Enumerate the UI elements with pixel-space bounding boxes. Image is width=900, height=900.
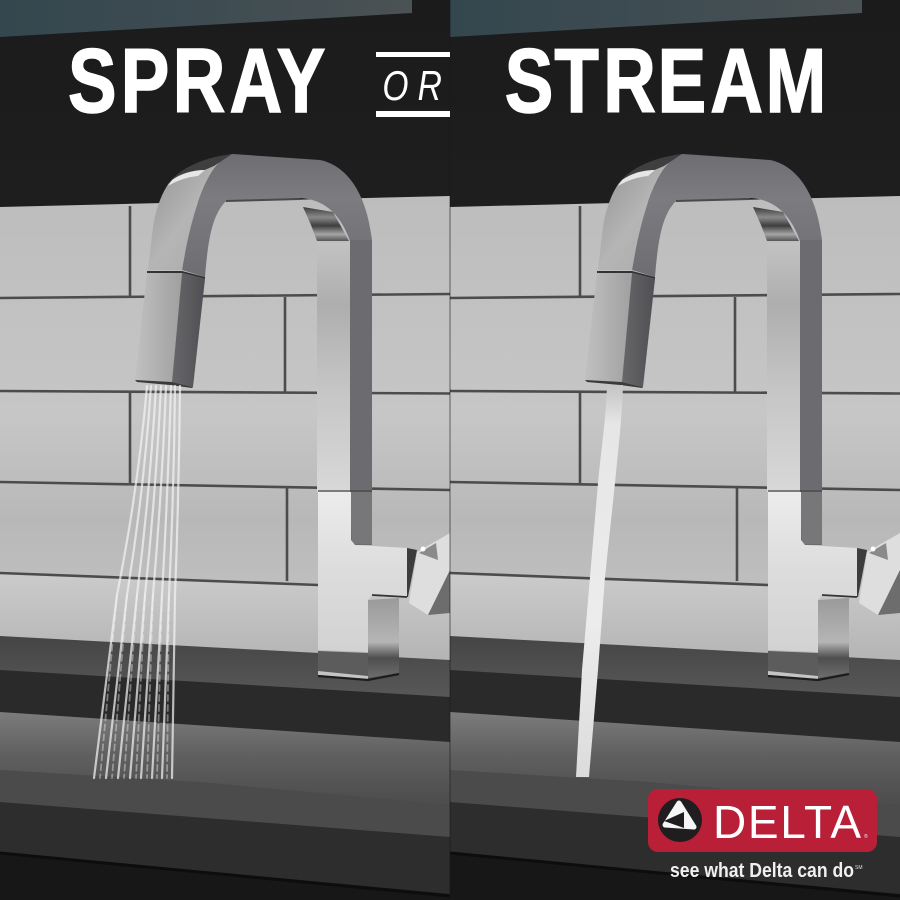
registered mark: ® — [864, 833, 868, 840]
logo: Delta — [648, 789, 877, 882]
heading: OR with rules — [376, 52, 450, 117]
wall, tiles, counter and sink background — [0, 0, 450, 900]
divider seam — [450, 0, 451, 900]
red badge — [648, 789, 877, 852]
tagline: see what Delta can do — [670, 860, 854, 882]
heading: SPRAY: SPRAY — [68, 30, 325, 132]
faucet: stream mode — [585, 154, 900, 680]
heading: OR with rules: OR — [382, 64, 442, 110]
service mark: SM — [855, 865, 862, 871]
faucet: spray mode — [135, 154, 450, 680]
water spray — [94, 386, 180, 778]
icon: Delta triangle mark — [658, 798, 702, 842]
panel: spray scene — [0, 0, 450, 900]
wall, tiles, counter and sink background — [450, 0, 900, 900]
water stream — [576, 385, 623, 777]
wordmark: DELTA — [713, 796, 861, 848]
panel: stream scene — [450, 0, 900, 900]
heading: STREAM: STREAM — [505, 30, 826, 132]
